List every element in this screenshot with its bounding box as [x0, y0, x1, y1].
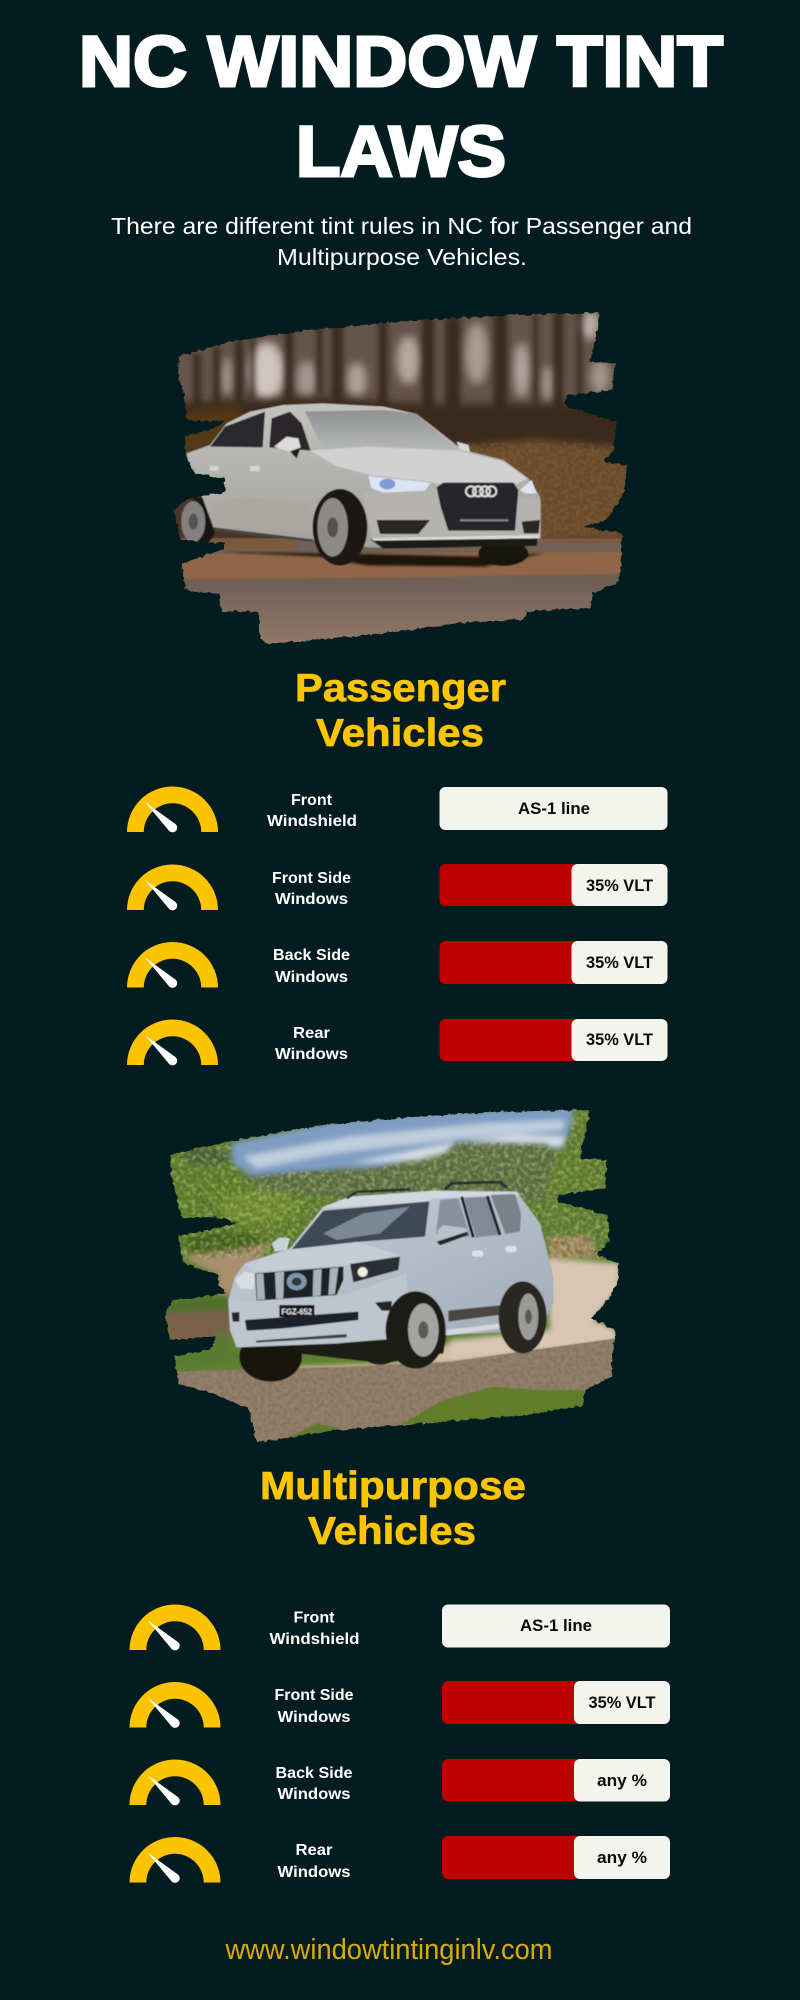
- label: Front Side: [272, 870, 351, 887]
- icon: gauge: [130, 1682, 220, 1728]
- label: Back Side: [276, 1765, 353, 1782]
- roof rails: [445, 1182, 507, 1189]
- front fender: [228, 1273, 410, 1347]
- number plate: FGZ-652: [281, 1306, 312, 1316]
- value bar: 35% VLT: [586, 953, 654, 972]
- far front tyre: [478, 546, 529, 566]
- heading: Multipurpose Vehicles: Multipurpose: [260, 1465, 526, 1508]
- icon: gauge: [127, 942, 218, 988]
- multipurpose row: rear windows: [130, 1836, 670, 1883]
- front wheel: [313, 489, 367, 566]
- windshield: [305, 410, 450, 444]
- grass: [400, 1387, 587, 1425]
- earth: [182, 1243, 270, 1297]
- multipurpose row: front windshield: [130, 1604, 670, 1650]
- label: Windshield: [270, 1631, 360, 1648]
- heading: Multipurpose Vehicles: Vehicles: [308, 1510, 476, 1553]
- mirror: [274, 436, 302, 452]
- ground shadow: [222, 552, 543, 567]
- side panels: [213, 497, 313, 532]
- passenger row: front windshield: [127, 786, 668, 832]
- label: Windows: [278, 1786, 351, 1803]
- value bar: [442, 1836, 670, 1879]
- title: NC WINDOW TINT: [79, 23, 723, 102]
- value bar: [440, 787, 668, 830]
- side trim and step: [448, 1304, 512, 1322]
- value bar: [442, 1604, 670, 1648]
- title: [79, 23, 723, 192]
- road: [173, 1338, 615, 1445]
- label: [272, 870, 351, 908]
- footer website: www.windowtintinginlv.com: [225, 1934, 552, 1966]
- icon: gauge: [127, 786, 218, 832]
- side windows: [436, 1198, 470, 1237]
- left front tyre: [238, 1344, 302, 1382]
- value bar: 35% VLT: [588, 1693, 656, 1712]
- foliage texture: [163, 1107, 630, 1263]
- heading: Passenger Vehicles: [295, 667, 506, 755]
- label: Rear: [296, 1842, 332, 1859]
- multipurpose row: back side windows: [130, 1759, 670, 1805]
- value bar: AS-1 line: [518, 799, 590, 818]
- label: Back Side: [273, 947, 350, 964]
- label: [274, 1687, 354, 1726]
- intro text: Multipurpose Vehicles.: [277, 244, 527, 270]
- heading: Passenger Vehicles: Passenger: [295, 667, 506, 710]
- icon: gauge: [127, 1020, 218, 1065]
- value bar: [442, 1759, 670, 1802]
- mirrors: [437, 1224, 468, 1238]
- body: [228, 1192, 553, 1347]
- bumper: [366, 500, 542, 540]
- value bar: [440, 941, 668, 984]
- under body: [293, 1333, 447, 1363]
- icon: gauge: [130, 1604, 220, 1650]
- heading: Passenger Vehicles: Vehicles: [316, 712, 484, 755]
- rear wheel: [192, 497, 216, 542]
- hood: [245, 1242, 400, 1272]
- value bar: [442, 1681, 670, 1724]
- icon: gauge: [127, 864, 218, 910]
- icon: gauge: [130, 1760, 220, 1805]
- headlamps: [368, 476, 431, 493]
- passenger row: front side windows: [127, 864, 668, 910]
- body: [187, 403, 541, 547]
- label: Windows: [275, 969, 348, 986]
- grille: [255, 1267, 343, 1301]
- intro text: There are different tint rules in NC for Passenger and: [111, 213, 692, 239]
- front wheel: [386, 1291, 446, 1369]
- photo: silver SUV in brush mask: [160, 1107, 630, 1447]
- label: Front Side: [274, 1687, 354, 1704]
- windshield: [292, 1201, 429, 1249]
- value bar: 35% VLT: [586, 1030, 654, 1049]
- icon: gauge: [130, 1837, 220, 1883]
- label: Front: [294, 1610, 335, 1626]
- hood: [310, 447, 527, 484]
- value bar: AS-1 line: [520, 1616, 592, 1635]
- value bar: any %: [597, 1771, 647, 1790]
- hills: [240, 1142, 563, 1200]
- side windows: [210, 412, 265, 447]
- rear wheel: [499, 1281, 547, 1353]
- dust: [450, 1258, 620, 1363]
- label: [278, 1842, 351, 1881]
- door details: [472, 1251, 483, 1257]
- value bar: [440, 1019, 668, 1061]
- multipurpose row: front side windows: [130, 1681, 670, 1728]
- road and ground: [206, 540, 622, 554]
- air intakes: [377, 520, 430, 534]
- label: Front: [291, 792, 333, 809]
- badge: [287, 1273, 307, 1290]
- label: Windows: [278, 1709, 351, 1726]
- lower grille: [245, 1312, 358, 1331]
- trees: [170, 1142, 337, 1257]
- value bar: [440, 864, 668, 906]
- value bar: 35% VLT: [586, 876, 654, 895]
- roof: [323, 1191, 520, 1207]
- grille: [437, 483, 518, 531]
- value bar: any %: [597, 1848, 647, 1867]
- heading: Multipurpose Vehicles: [260, 1465, 526, 1553]
- left strips: [165, 1293, 230, 1313]
- headlamps: [350, 1257, 400, 1282]
- label: Windows: [275, 1046, 348, 1063]
- sky: [230, 1107, 573, 1175]
- label: [273, 947, 350, 986]
- label: Windshield: [267, 813, 357, 830]
- label: [267, 792, 357, 830]
- label: [270, 1610, 360, 1648]
- label: Windows: [275, 891, 348, 908]
- intro text: [111, 213, 692, 270]
- title: LAWS: [296, 113, 506, 192]
- passenger row: rear windows: [127, 1019, 668, 1065]
- label: [276, 1765, 353, 1803]
- passenger row: back side windows: [127, 941, 668, 988]
- photo: silver sedan in brush mask: [163, 303, 637, 650]
- label: Windows: [278, 1864, 351, 1881]
- label: Rear: [293, 1025, 330, 1042]
- label: [275, 1025, 348, 1063]
